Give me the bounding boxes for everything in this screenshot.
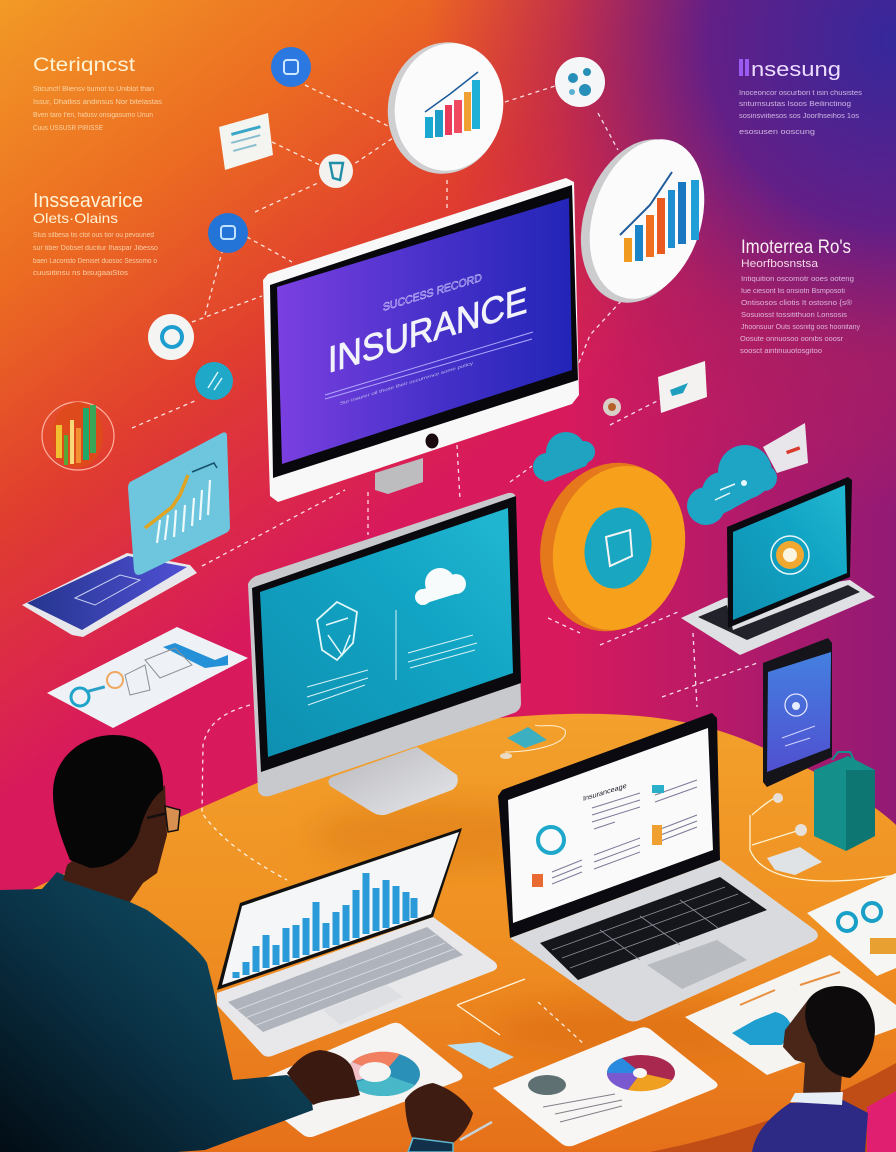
icon: blue badge top (271, 47, 311, 87)
icon: teal badge (195, 362, 233, 400)
main monitor (263, 178, 579, 502)
round chart: right (561, 123, 724, 319)
main person (0, 735, 492, 1152)
monitor stand (375, 458, 423, 494)
text block: top left: Cteriqncst (33, 55, 136, 76)
text block: right side rates: Iue ciesont lis onsiotn Bsmposoti (741, 288, 845, 295)
far hand (405, 1083, 473, 1143)
glasses (147, 806, 180, 832)
tablet on left (22, 553, 197, 637)
screen (217, 828, 462, 990)
text block: top right: Inoceoncor oscurbori t isin chusistes (739, 90, 863, 97)
colour tags (652, 825, 662, 845)
lid (498, 713, 720, 938)
small card (658, 361, 707, 413)
card: far right (807, 873, 896, 976)
text block: top right: sosinsviitiesos sos Joorlhseihos 1os (739, 113, 860, 120)
white tag card (763, 423, 808, 473)
text block: top left: Issur, Dhatliss andinsus Nor bitelastas (33, 99, 163, 106)
centre monitor (248, 493, 521, 815)
text block: top right: nsesung (751, 59, 841, 81)
table line accents (457, 979, 525, 1035)
jacket (0, 872, 313, 1152)
text block: top left (33, 55, 163, 132)
text block: right side rates (740, 237, 860, 355)
round chart: top centre (377, 33, 513, 183)
screen (260, 508, 513, 757)
text block: right side rates: Sosuiosst tossitithuon Lonsosis (741, 312, 848, 319)
sweater (752, 1100, 868, 1152)
small badge (603, 398, 621, 416)
note card (219, 113, 273, 170)
keyboard (540, 877, 767, 980)
monitor body (263, 178, 579, 502)
round table (0, 714, 896, 1152)
shield detail (326, 618, 350, 655)
caption: Sur insurer oil those their occurrence some policy (340, 360, 474, 406)
pen (460, 1122, 492, 1140)
right laptop (681, 477, 875, 655)
cloud left (533, 432, 595, 482)
text block: top right: esosusen ooscung (739, 129, 815, 136)
icon: white circle top right (555, 57, 605, 107)
table accessory: mouse and earphones (750, 793, 896, 881)
shield icon (317, 602, 357, 660)
magenta corner (867, 1091, 896, 1152)
trackpad (647, 940, 747, 989)
stand (328, 747, 458, 815)
left laptop (217, 828, 497, 1057)
phone (763, 638, 832, 787)
screen (508, 728, 713, 923)
centre right laptop (498, 713, 818, 1021)
teal bag (814, 752, 875, 851)
text block: top left: Cuus USSUSR PIRISSE (33, 125, 103, 132)
icon: blue badge left (208, 213, 248, 253)
hair (53, 735, 163, 868)
subtitle: SUCCESS RECORD (383, 272, 482, 314)
text block: insurance claims: baen Lacoristo Deniset duosoc Sessomo o (33, 258, 157, 265)
text block: insurance claims: Insseavarice (33, 190, 143, 212)
round bar chart icon (42, 402, 114, 470)
trackpad (323, 985, 403, 1025)
collar (790, 1092, 843, 1105)
text block: insurance claims: Olets·Olains (33, 210, 118, 226)
body (248, 493, 521, 796)
icon: white flower badge (148, 314, 194, 360)
left chart card (128, 432, 230, 575)
text block: right side rates: Ontisosos cliotis It ostosno {s® (741, 299, 853, 307)
text lines (307, 610, 477, 705)
icon: small white badge (319, 154, 353, 188)
text block: right side rates: Jhoonsuur Outs sosnitg oos hoonitany (741, 324, 860, 331)
card: right pie chart (493, 1027, 718, 1146)
card: right document (685, 955, 896, 1075)
text block: insurance claims: Stus silbesa tis ctot ous tior ou pevouned (33, 232, 154, 239)
text block: top right (739, 59, 863, 136)
text block: top left: Bven taro t'en, hidusv onsigasumo Unun (33, 112, 153, 119)
document lines (552, 780, 697, 884)
bezel (270, 185, 578, 478)
screen heading: Insuranceage (583, 783, 627, 803)
text block: right side rates: soosct aintinuuotosgitoo (740, 348, 822, 355)
cuff (408, 1138, 453, 1152)
orange disc icon (523, 447, 702, 647)
keyboard (228, 927, 463, 1032)
near hand (287, 1050, 360, 1105)
text block: insurance claims (33, 190, 158, 277)
insurance title: INSURANCE (328, 279, 528, 381)
ring icon (538, 827, 564, 853)
text block: right side rates: Oosute onnuosoo oonibs ooosr (740, 336, 844, 343)
base (217, 917, 497, 1057)
cloud right (687, 445, 777, 525)
cloud on screen (415, 568, 466, 605)
small card on table (447, 1042, 514, 1069)
text block: insurance claims: sur tiber Dobset ducitur Ihaspar Jibesso (33, 245, 158, 252)
camera (426, 434, 438, 448)
base (510, 860, 818, 1021)
text block: top left: Sticunct! Bliensv tiumot to Uniblot than (33, 86, 154, 93)
screen (277, 198, 572, 464)
skin (63, 785, 167, 902)
card: left pie chart (243, 1023, 462, 1137)
text block: right side rates: Heorfbosnstsa (741, 258, 819, 270)
underlines (325, 332, 533, 399)
bezel (252, 496, 521, 772)
text block: top right: snturnsustas Isoos Beilinctinog (739, 101, 851, 108)
left document card (47, 627, 248, 728)
face and neck (783, 1000, 845, 1097)
text block: insurance claims: cuusiitinsu ns bisugaaiStos (33, 270, 129, 277)
text block: right side rates: Intiquition oscomotr ooes ooteng (741, 276, 854, 283)
screen bars (236, 873, 414, 978)
hair (805, 986, 875, 1078)
table accessory: teal tablet (500, 725, 565, 759)
text block: right side rates: Imoterrea Ro's (741, 237, 851, 258)
table rim (650, 1063, 896, 1152)
dashed connectors (132, 85, 760, 1045)
small person bottom right (752, 986, 875, 1152)
